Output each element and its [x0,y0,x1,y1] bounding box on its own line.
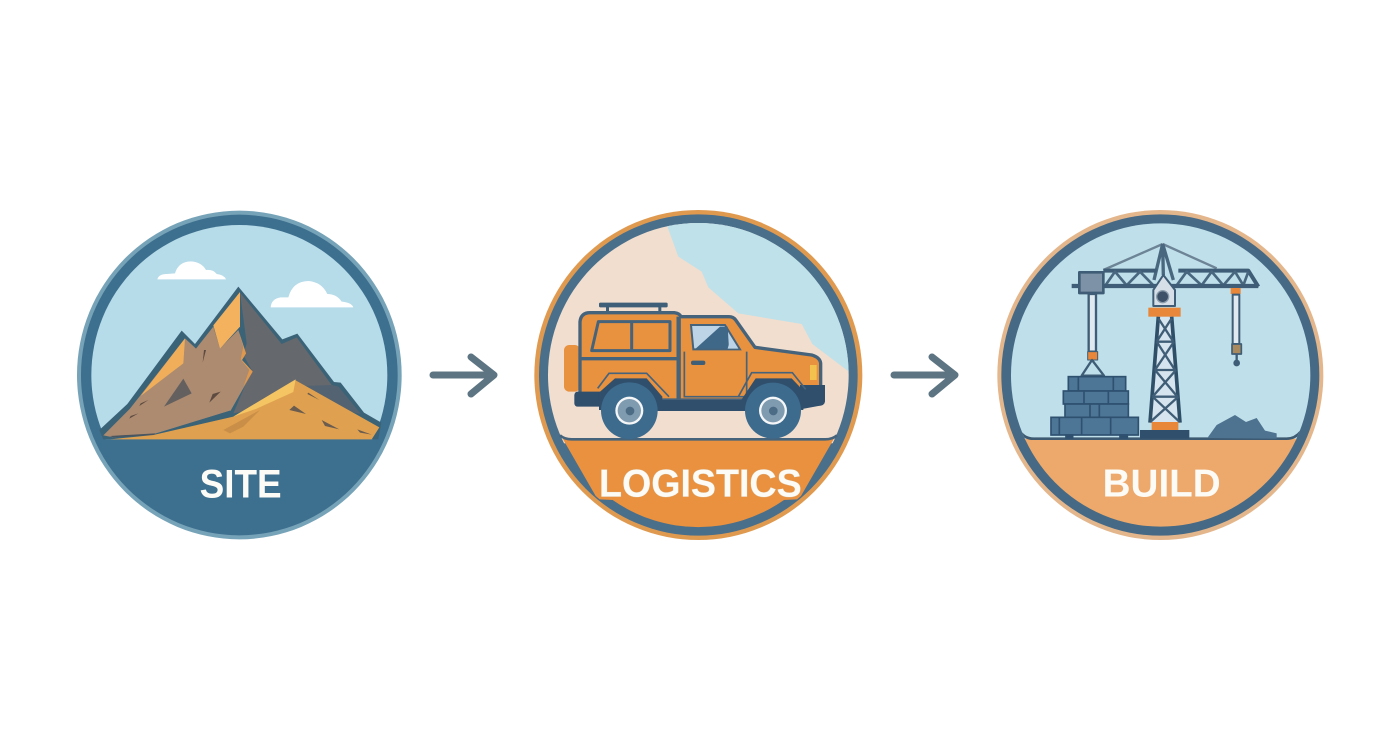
panel: site badge [77,211,402,539]
background landscape [545,220,853,443]
label: LOGISTICS: LOGISTICS [599,463,802,506]
orange ground banner [560,435,837,527]
panel: logistics badge [534,210,862,540]
sky with clouds [87,223,393,439]
arrow: site to logistics [433,357,494,394]
label: SITE: SITE [200,462,282,506]
mountain illustration [99,287,381,439]
icon: stacked bricks [1051,377,1138,438]
badge ring: site [77,211,402,539]
icon: rubble pile [1207,415,1277,439]
badge ring: build [997,210,1323,540]
icon: tower crane [1072,244,1258,439]
panel: build badge [997,210,1323,540]
arrow: logistics to build [894,357,955,394]
sky and ground [1007,220,1317,539]
badge ring: logistics [534,210,862,540]
icon: off-road truck [564,303,825,439]
label: BUILD: BUILD [1103,463,1221,506]
